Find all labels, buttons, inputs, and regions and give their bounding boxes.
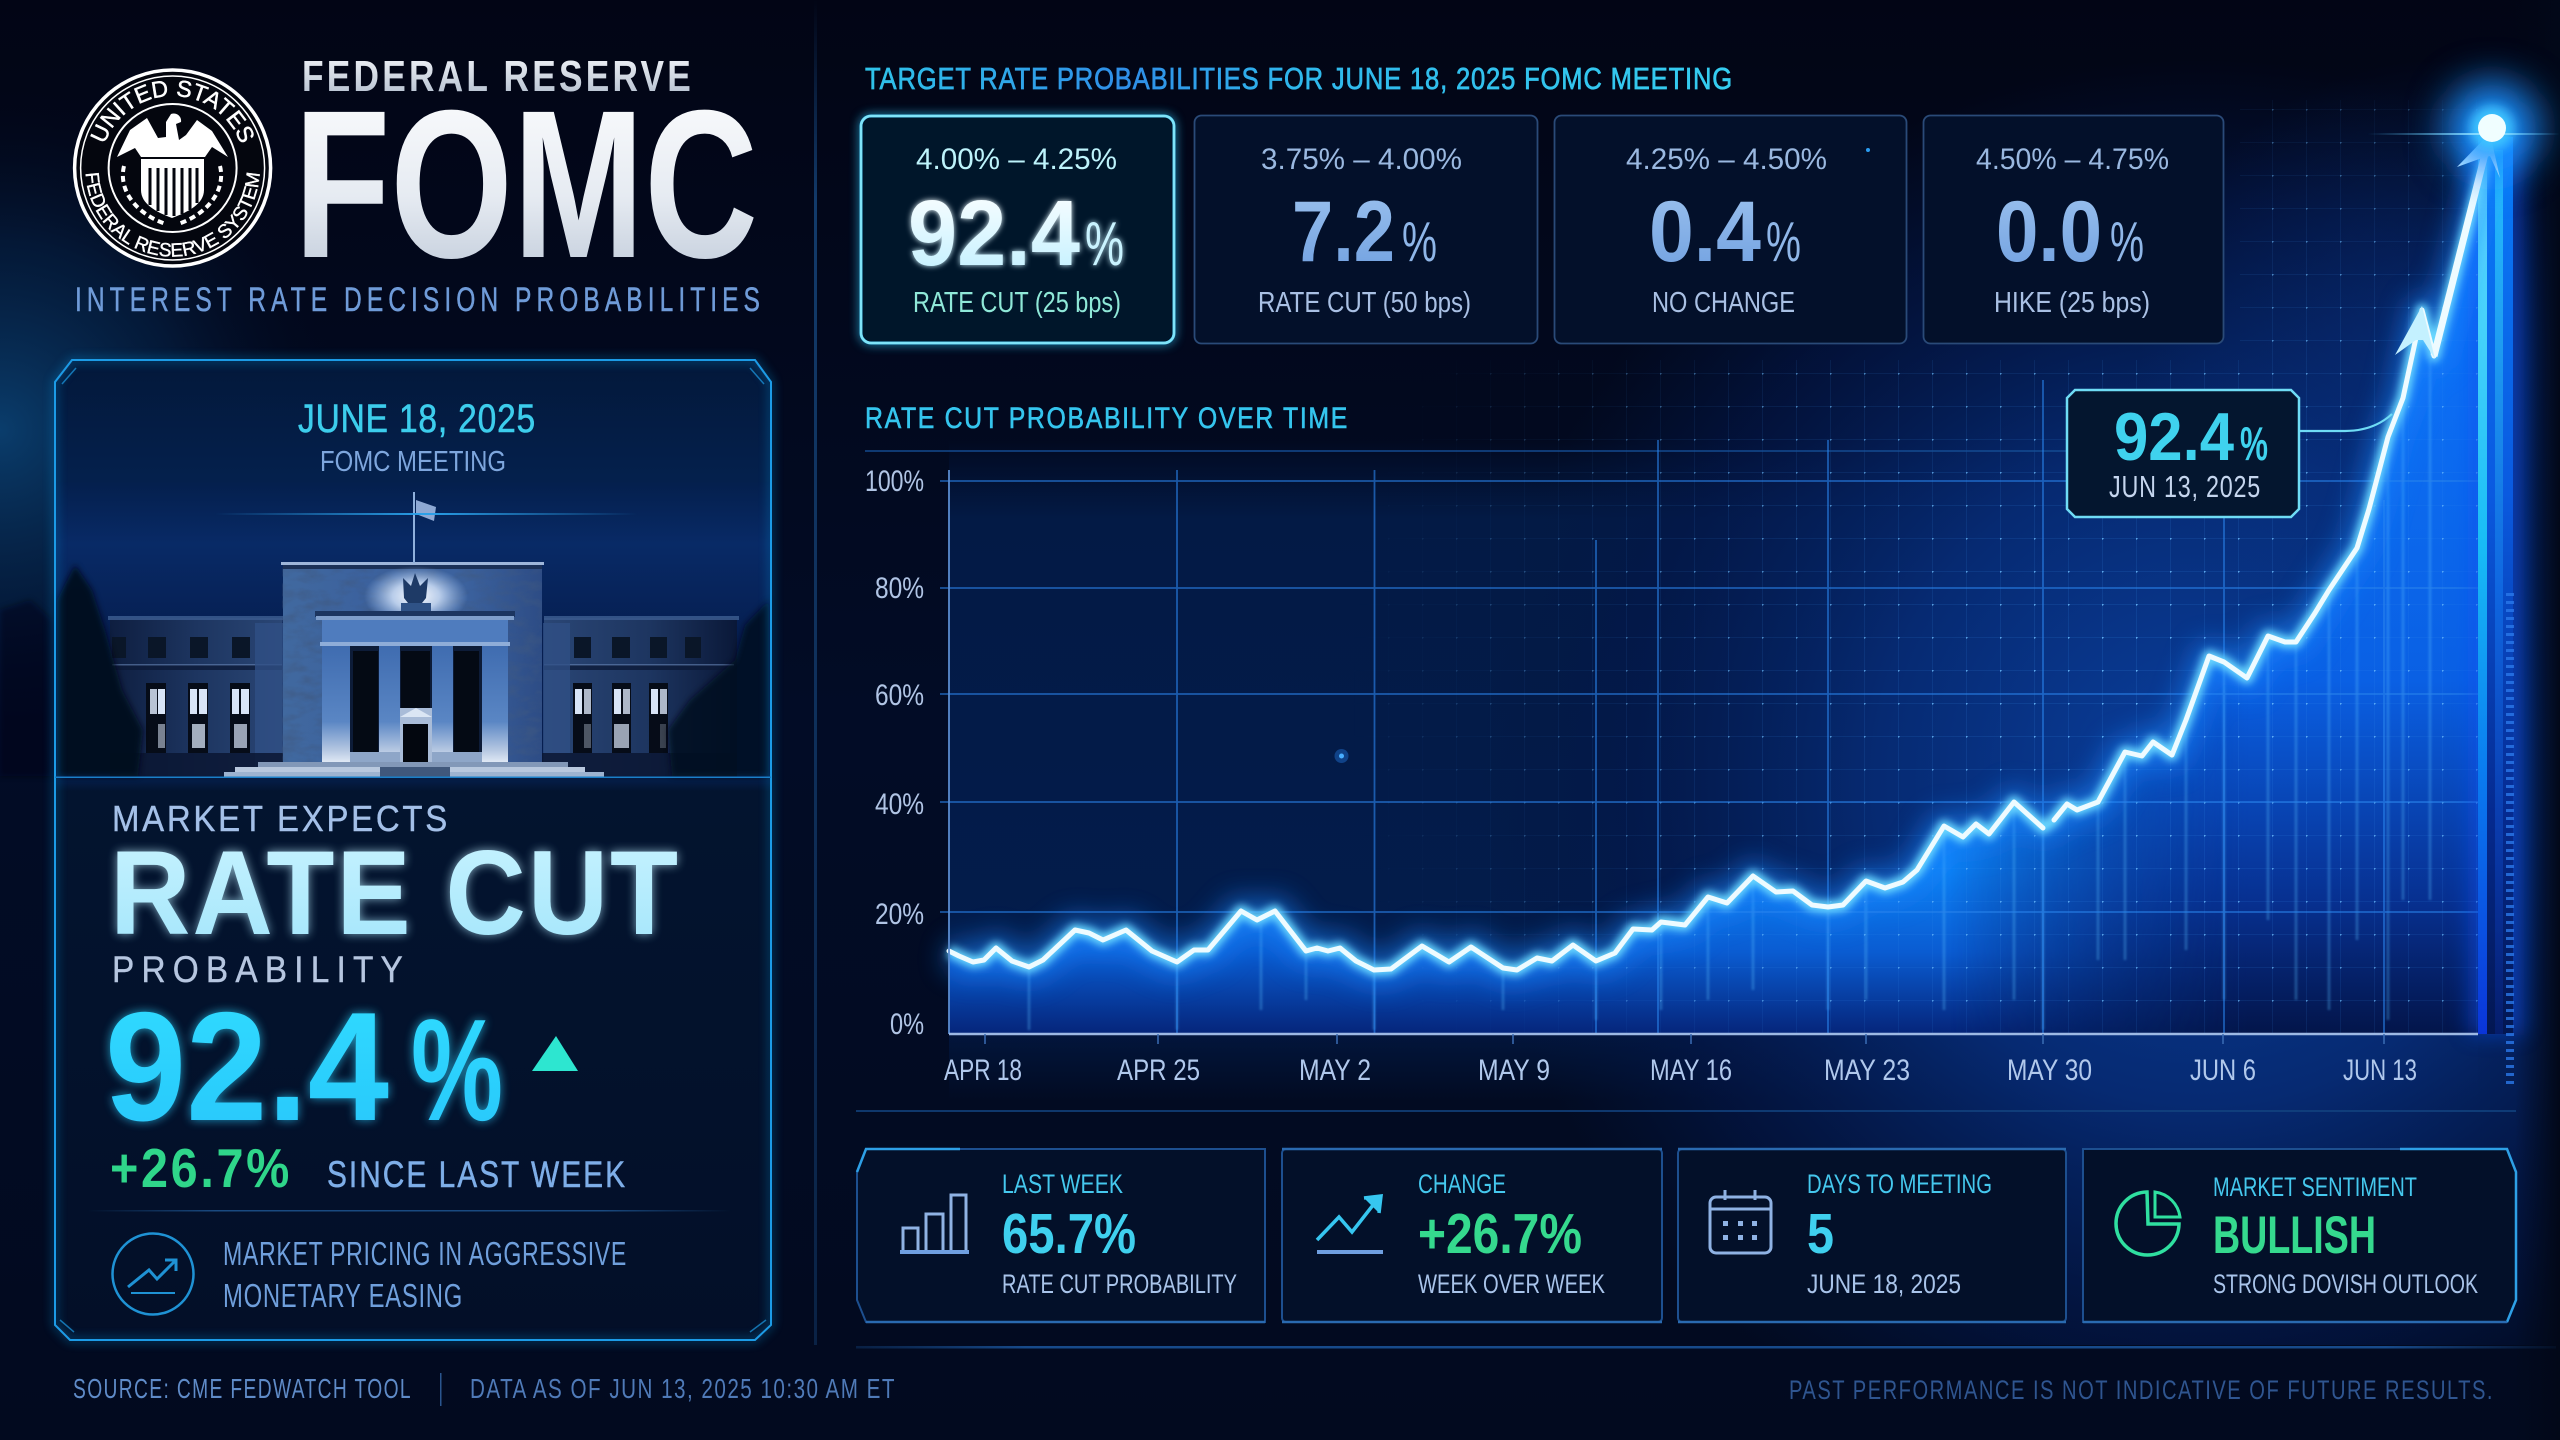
callout: latest value: % [2240, 417, 2268, 470]
x axis labels: MAY 30 [2007, 1054, 2092, 1087]
light streak [214, 513, 638, 515]
big number: % [411, 989, 503, 1151]
title: Federal Reserve: FEDERAL RESERVE [302, 52, 694, 101]
x axis labels: MAY 23 [1824, 1054, 1910, 1087]
door [400, 708, 432, 717]
y axis labels: 20% [875, 898, 924, 931]
footer source: DATA AS OF JUN 13, 2025 10:30 AM ET [470, 1373, 896, 1404]
eagle sculpture [364, 566, 468, 626]
stat card: change [1282, 1149, 1662, 1322]
card: 4.00% - 4.25% [861, 116, 1174, 343]
card: 4.00% - 4.25%: % [1085, 210, 1124, 279]
card: 4.50% - 4.75%: % [2110, 210, 2144, 274]
stat card: change: CHANGE [1418, 1169, 1506, 1199]
axes [949, 470, 2478, 1044]
y axis labels: 100% [865, 465, 924, 498]
title: FOMC: FOMC [294, 66, 758, 302]
y axis labels: 60% [875, 679, 924, 712]
stat card: last week [857, 1149, 1265, 1322]
meeting label: FOMC MEETING [320, 446, 506, 478]
icon: Federal Reserve seal: UNITED STATES [90, 80, 254, 142]
icon: trend arrow [1317, 1196, 1383, 1252]
card: 4.00% - 4.25%: RATE CUT (25 bps) [913, 287, 1121, 319]
icon: Federal Reserve seal: FEDERAL RESERVE SYSTEM [85, 172, 260, 257]
weekly change: +26.7% [110, 1137, 292, 1199]
probability label: PROBABILITY [112, 949, 410, 990]
icon: bars [900, 1195, 969, 1252]
easing note: MARKET PRICING IN AGGRESSIVE [223, 1235, 627, 1272]
icon: Federal Reserve seal [72, 68, 272, 268]
icon: calendar [1710, 1190, 1771, 1253]
chart: rate cut probability [865, 82, 2560, 1087]
card: 4.00% - 4.25%: 92.4 [908, 181, 1080, 285]
x axis labels: APR 18 [944, 1054, 1022, 1087]
easing note: MONETARY EASING [223, 1277, 463, 1314]
stat card: market sentiment: BULLISH [2213, 1206, 2376, 1265]
x axis labels: MAY 9 [1478, 1054, 1550, 1087]
right edge light bars [2468, 135, 2524, 1085]
icon: trend circle [112, 1234, 194, 1314]
x axis labels: JUN 13 [2343, 1054, 2417, 1087]
card: 4.50% - 4.75%: 4.50% – 4.75% [1976, 143, 2169, 176]
central block [283, 565, 542, 768]
stat card: last week: RATE CUT PROBABILITY [1002, 1269, 1237, 1299]
callout: latest value [2067, 390, 2392, 517]
columns [322, 646, 508, 762]
icon: up triangle [532, 1036, 578, 1071]
y axis labels: 40% [875, 788, 924, 821]
arrowheads [2395, 133, 2500, 359]
card: 4.25% - 4.50%: % [1766, 210, 1801, 274]
card: 4.25% - 4.50%: 0.4 [1649, 184, 1761, 280]
stat card: days to meeting: 5 [1807, 1202, 1834, 1266]
wing lower windows [146, 683, 668, 753]
stat card: days to meeting [1678, 1149, 2066, 1322]
stat card: days to meeting: DAYS TO MEETING [1807, 1169, 1992, 1199]
portico [315, 611, 515, 617]
card: 3.75% - 4.00%: 3.75% – 4.00% [1261, 143, 1462, 176]
chart grid [865, 100, 2484, 1034]
stat card: market sentiment [2083, 1149, 2516, 1322]
callout: latest value: 92.4 [2114, 399, 2234, 475]
callout: latest value: JUN 13, 2025 [2109, 469, 2261, 504]
panel: rate cut summary [0, 360, 771, 1340]
market expects label: MARKET EXPECTS [112, 798, 450, 839]
card: 3.75% - 4.00% [1194, 116, 1538, 344]
rate cut headline: RATE CUT [110, 826, 680, 960]
trees [0, 565, 769, 776]
stat card: change: +26.7% [1418, 1202, 1582, 1266]
panel frame [55, 360, 771, 1340]
wings [110, 618, 282, 776]
since last week: SINCE LAST WEEK [327, 1154, 627, 1195]
card: 4.00% - 4.25%: 4.00% – 4.25% [916, 143, 1117, 176]
probability line [949, 310, 2434, 970]
footer source: SOURCE: CME FEDWATCH TOOL [73, 1373, 412, 1404]
big number: 92.4 [105, 980, 389, 1153]
vertical light streaks [1029, 360, 2430, 1030]
subtitle: INTEREST RATE DECISION PROBABILITIES [75, 281, 765, 319]
x axis labels: JUN 6 [2190, 1054, 2256, 1087]
area under the line [949, 145, 2489, 1034]
heading: target rate probabilities: TARGET RATE PROBABILITIES FOR JUNE 18, 2025 FOMC MEETING [865, 61, 1733, 96]
easing note [223, 1235, 627, 1314]
dark openings [353, 651, 479, 752]
card: 4.50% - 4.75% [1924, 116, 2224, 344]
card: 4.50% - 4.75%: HIKE (25 bps) [1994, 287, 2150, 319]
line glow [949, 145, 2489, 970]
icon: pie chart [2116, 1192, 2180, 1255]
meeting date: JUNE 18, 2025 [298, 397, 536, 441]
footer source [73, 1373, 896, 1406]
stat card: change: WEEK OVER WEEK [1418, 1269, 1605, 1299]
card: 4.50% - 4.75%: 0.0 [1996, 184, 2102, 280]
illustration: Federal Reserve building [0, 482, 771, 777]
steps [224, 762, 604, 777]
wing upper windows [112, 637, 701, 658]
x axis labels: MAY 2 [1299, 1054, 1371, 1087]
y axis labels [865, 465, 924, 1041]
heading: rate cut probability over time: RATE CUT PROBABILITY OVER TIME [865, 402, 1349, 435]
stat card: last week: LAST WEEK [1002, 1169, 1123, 1199]
card: 4.25% - 4.50%: NO CHANGE [1652, 287, 1795, 319]
x axis labels: APR 25 [1117, 1054, 1200, 1087]
stat card: market sentiment: MARKET SENTIMENT [2213, 1172, 2417, 1202]
stat card: last week: 65.7% [1002, 1202, 1136, 1266]
y axis labels: 0% [890, 1008, 924, 1041]
card: 4.25% - 4.50% [1554, 116, 1906, 344]
card: 3.75% - 4.00%: % [1402, 210, 1437, 274]
glowing tip [2367, 82, 2560, 174]
eagle [117, 113, 228, 218]
stat card: days to meeting: JUNE 18, 2025 [1807, 1269, 1961, 1299]
card: 3.75% - 4.00%: 7.2 [1292, 184, 1395, 280]
flagpole and flag [413, 492, 415, 563]
card: 4.25% - 4.50%: 4.25% – 4.50% [1626, 143, 1827, 176]
x axis labels: MAY 16 [1650, 1054, 1732, 1087]
card: 3.75% - 4.00%: RATE CUT (50 bps) [1258, 287, 1471, 319]
y axis labels: 80% [875, 572, 924, 605]
x axis labels [944, 1054, 2417, 1087]
